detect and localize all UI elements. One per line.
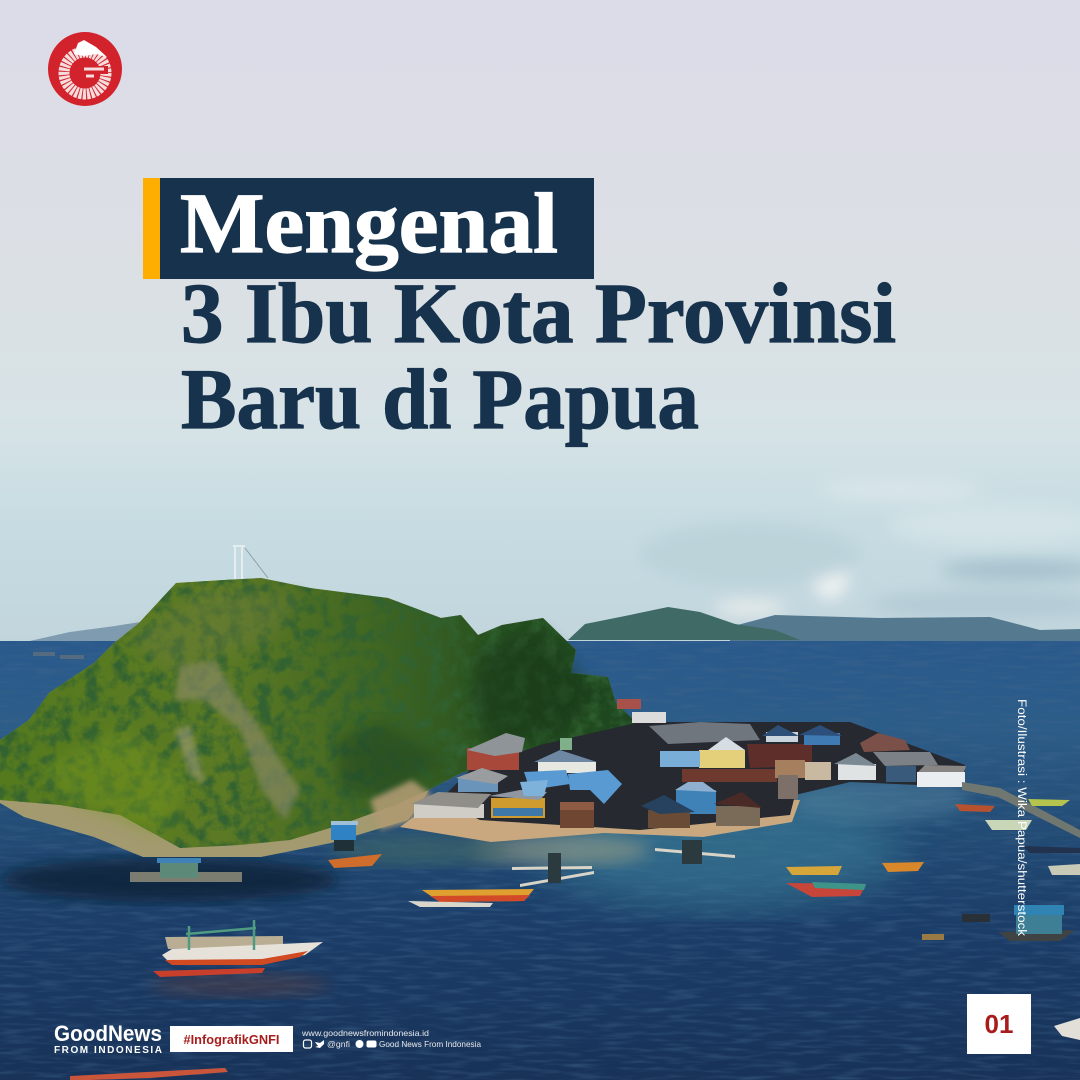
title: Baru di Papua: [181, 351, 699, 447]
house: red with grey roof: [467, 733, 525, 770]
icon: instagram: [304, 1040, 312, 1048]
large boat lower-left: [153, 920, 323, 977]
house: yellow and blue: [489, 790, 547, 818]
jetty: [962, 782, 1080, 838]
boat bottom right: [1054, 1018, 1080, 1040]
house: dark brown: [714, 792, 762, 826]
background photo: sea: [0, 641, 1080, 1080]
house: blue gable: [675, 777, 717, 814]
clouds on the horizon: [640, 480, 1080, 619]
logo: red Garuda circle: [48, 32, 122, 106]
distant mountains: [25, 607, 1080, 642]
roof: white: [708, 737, 745, 750]
GoodNews from Indonesia logo: [54, 1021, 162, 1056]
boat bottom edge: [70, 1068, 228, 1080]
house: brown with yellow trim: [641, 795, 695, 828]
roof: light blue: [660, 751, 700, 767]
roofs: grey row: [649, 722, 760, 744]
houses: hillside red: [617, 699, 666, 723]
stilt village: [400, 699, 966, 842]
title block accent and panel: [143, 178, 594, 279]
roofs: rust: [682, 769, 777, 782]
page number: [967, 994, 1031, 1054]
house: gable one: [762, 725, 799, 742]
title: [180, 175, 896, 447]
tower on the hill: [233, 545, 268, 588]
website and social links: [301, 1028, 481, 1049]
title: 3 Ibu Kota Provinsi: [181, 265, 896, 361]
icon: twitter: [315, 1040, 324, 1048]
house: gable two: [799, 725, 842, 745]
GoodNews from Indonesia logo: GoodNews: [54, 1021, 162, 1046]
photo credit: Foto/Ilustrasi : Wika Papua/shutterstock: [1015, 699, 1027, 936]
hashtag label: #InfografikGNFI: [184, 1033, 280, 1047]
island hill: [0, 578, 637, 857]
title: Mengenal: [180, 175, 558, 271]
roofs: dark red: [747, 744, 812, 768]
house: brown rust: [560, 802, 594, 828]
blue hut on stilts: [331, 821, 358, 851]
roof: long grey: [873, 752, 938, 766]
house cluster: blue roofs: [520, 770, 622, 804]
wall: navy under roof: [886, 766, 916, 782]
icon: facebook: [356, 1040, 364, 1048]
floating hut right: [962, 905, 1075, 941]
website and social links: Good News From Indonesia: [379, 1039, 481, 1049]
website and social links: @gnfi: [327, 1039, 350, 1049]
website and social links: www.goodnewsfromindonesia.id: [301, 1028, 429, 1038]
floating hut left: [130, 858, 242, 882]
house: mosque: [534, 738, 597, 773]
houses: wood: [775, 760, 831, 799]
house: long grey: [411, 792, 491, 818]
boats: [328, 799, 1080, 940]
page number: 01: [985, 1009, 1013, 1039]
hashtag label: [170, 1026, 293, 1052]
background photo: sky: [0, 0, 1080, 643]
GoodNews from Indonesia logo: FROM INDONESIA: [54, 1045, 162, 1056]
roofs: brown red right: [860, 733, 910, 752]
house: white with grey roof: [834, 753, 877, 780]
icon: youtube: [366, 1040, 376, 1048]
house: blue wall: [456, 768, 508, 792]
house: white end: [917, 765, 966, 787]
house: yellow: [699, 750, 745, 768]
